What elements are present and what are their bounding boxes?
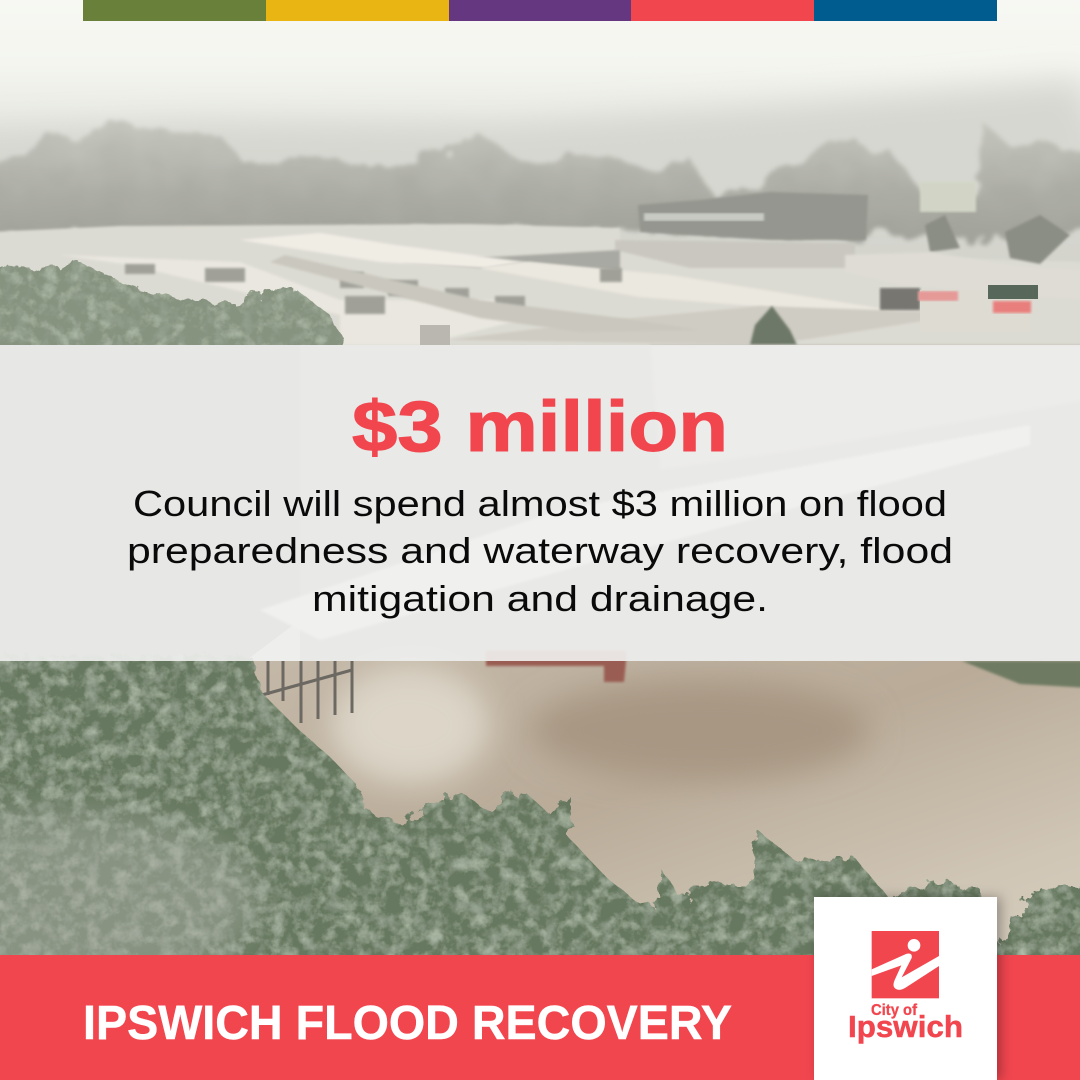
dark water patch: [530, 680, 870, 780]
river water: [230, 661, 1080, 960]
body text: [127, 483, 953, 619]
small foreground conifer: [750, 306, 797, 345]
tan warehouse wall: [615, 240, 855, 268]
back roof line: [0, 224, 1080, 345]
body text: preparedness and waterway recovery, flood: [127, 530, 953, 571]
dark storefront: [880, 288, 920, 310]
grassy field: [920, 182, 976, 212]
body text: mitigation and drainage.: [312, 578, 768, 619]
wall and roof behind panel: [300, 345, 1080, 661]
logo card: City of Ipswich: [814, 897, 997, 1080]
dark units under roof: [400, 250, 620, 272]
heading: $3 million: $3 million: [352, 388, 728, 467]
trees hidden behind panel: [0, 345, 350, 665]
pale left water: [330, 665, 490, 785]
foreground tree mass: [0, 655, 1080, 970]
logo wordmark: Ipswich: [848, 1009, 963, 1044]
far bank: [962, 661, 1080, 688]
lower roof gap and rooftop units: [60, 255, 520, 345]
foreground left trees: [0, 262, 345, 370]
bridge pier: [486, 651, 626, 682]
footer title: IPSWICH FLOOD RECOVERY: [83, 997, 732, 1050]
distant misty hills: [0, 80, 1080, 240]
icon: Ipswich logo mark: [872, 931, 939, 998]
jetty posts: [262, 661, 352, 723]
main roofs: [240, 233, 525, 268]
right-side trees: [925, 215, 1070, 264]
misty haze over lower-left trees: [0, 810, 260, 990]
footer band: [0, 955, 1080, 1080]
mid-distance trees: [0, 122, 1080, 238]
light building right: [845, 252, 1080, 300]
logo wordmark: City of: [871, 1002, 918, 1019]
panel: translucent text band: [0, 345, 1080, 661]
colour stripe bar: [83, 0, 997, 21]
dark office building: [638, 192, 868, 240]
body text: Council will spend almost $3 million on flood: [133, 483, 947, 524]
